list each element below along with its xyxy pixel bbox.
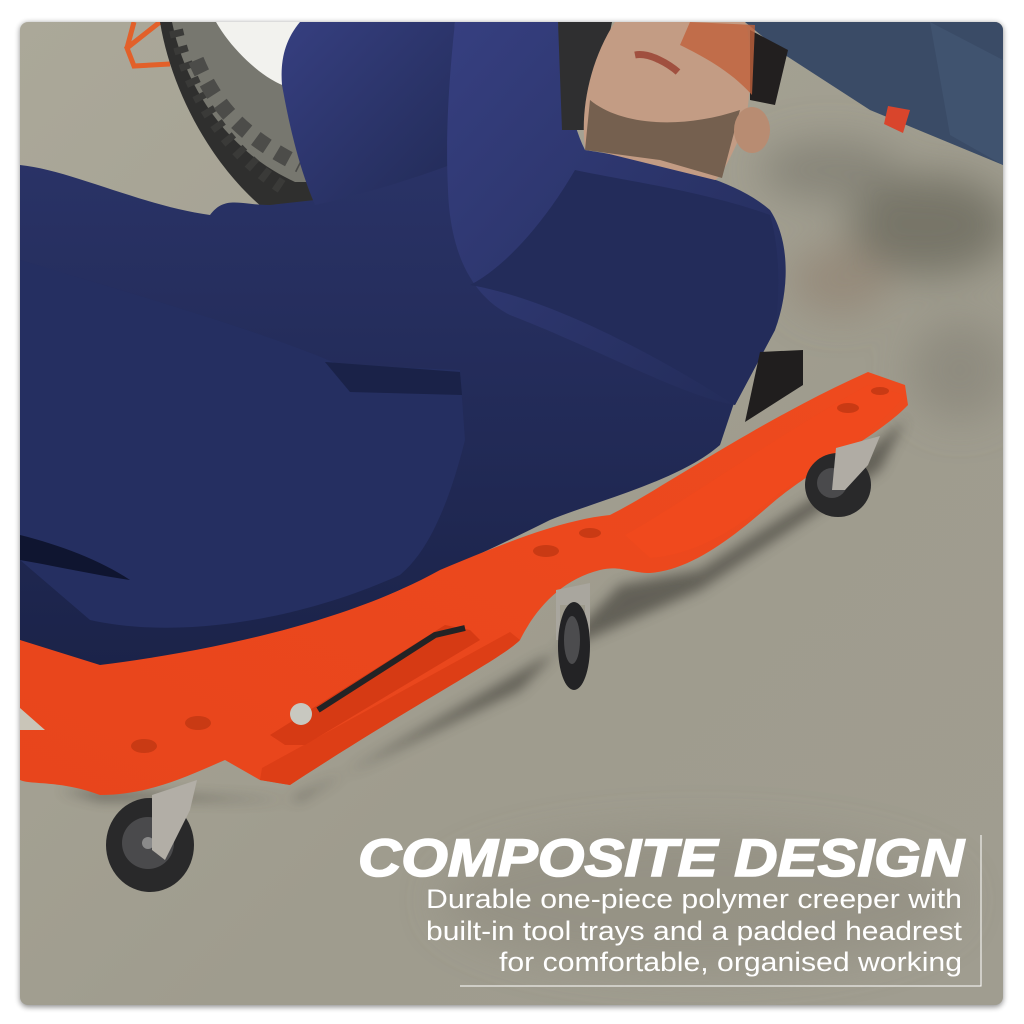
red stand foot — [884, 106, 910, 133]
caption heading: COMPOSITE DESIGN — [358, 829, 966, 888]
caption body text: Durable one-piece polymer creeper with — [426, 884, 962, 914]
tyre — [160, 22, 315, 212]
tyre tread lugs — [176, 30, 290, 192]
creeper side wall — [260, 632, 520, 785]
mounted spanner — [318, 628, 465, 710]
mechanic body — [20, 150, 735, 666]
trouser dark fold — [20, 535, 130, 580]
caption body text — [426, 884, 963, 977]
head — [584, 22, 788, 180]
orange stand — [127, 22, 170, 66]
caption body text: for comfortable, organised working — [499, 947, 962, 977]
trouser shading — [20, 392, 465, 628]
caption body text: built-in tool trays and a padded headrest — [426, 916, 963, 946]
headrest pad — [745, 350, 803, 422]
left raised sleeve — [282, 22, 455, 205]
tool tray — [270, 625, 480, 745]
creeper shadow on floor — [60, 420, 905, 800]
front left caster — [106, 780, 197, 892]
dark equipment behind arm — [558, 22, 612, 130]
caption rule — [460, 835, 981, 986]
shoulder and right raised arm — [447, 22, 786, 405]
van body — [745, 22, 1003, 165]
creeper head-end raised rim — [625, 385, 905, 558]
rear caster — [805, 436, 880, 517]
middle caster — [556, 583, 590, 690]
end gap — [20, 708, 45, 730]
creeper board — [20, 372, 908, 795]
creeper mounting holes — [131, 739, 157, 753]
floor stains — [440, 140, 1010, 970]
